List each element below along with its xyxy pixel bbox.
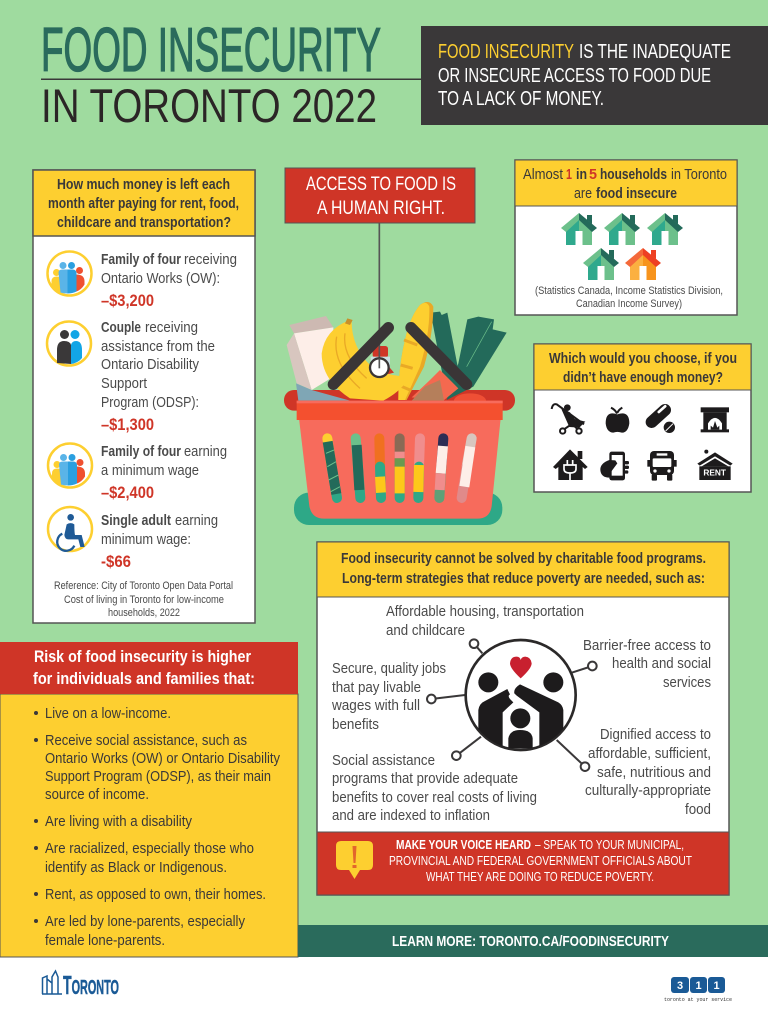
strategy: social assistance: and are indexed to inflation <box>332 808 490 824</box>
row: family of four on minimum wage <box>101 444 227 502</box>
logo: City of Toronto <box>42 970 119 1000</box>
strategy: dignified access: Dignified access to <box>600 727 711 743</box>
basket body <box>297 401 503 519</box>
strategy: housing <box>386 604 584 639</box>
source note: (Statistics Canada, Income Statistics Division, <box>535 285 723 297</box>
strategy: dignified access: affordable, sufficient, <box>588 746 711 762</box>
strategy: dignified access: culturally-appropriate <box>585 783 711 799</box>
call to action text <box>389 837 692 884</box>
reference note: Reference: City of Toronto Open Data Portal <box>54 580 233 592</box>
risk bullet list: Receive social assistance, such as <box>45 733 247 749</box>
row: family of four on Ontario Works <box>101 252 237 310</box>
panel header: 1 in 5: in Toronto <box>671 167 727 183</box>
basket slots <box>326 438 472 498</box>
source note: Canadian Income Survey) <box>576 298 682 310</box>
panel header: 1 in 5 <box>515 160 737 206</box>
row: couple on ODSP <box>101 320 215 434</box>
risk bullet list: Are led by lone-parents, especially <box>45 914 246 930</box>
panel: risk of food insecurity <box>0 642 298 957</box>
row: family of four on minimum wage: –$2,400 <box>101 483 154 502</box>
row: family of four on Ontario Works: receiving <box>184 252 237 268</box>
row: single adult on minimum wage: Single adult <box>101 513 171 529</box>
hanging line <box>377 223 382 367</box>
panel header: strategies: Food insecurity cannot be solved by charitable food programs. <box>341 551 706 567</box>
risk bullet list: Are racialized, especially those who <box>45 841 254 857</box>
strategy: housing: Affordable housing, transportation <box>386 604 584 620</box>
strategy: social assistance: benefits to cover real costs of living <box>332 790 537 806</box>
illustration: shopping basket of food <box>284 223 515 525</box>
row: single adult on minimum wage: earning <box>175 513 218 529</box>
panel: money left each month <box>33 170 255 623</box>
call to action text: PROVINCIAL AND FEDERAL GOVERNMENT OFFICIALS ABOUT <box>389 853 692 868</box>
banner: learn more <box>298 925 768 957</box>
strategy: dignified access <box>585 727 711 818</box>
icon: family of four <box>48 252 92 296</box>
row: couple on ODSP: assistance from the <box>101 339 215 355</box>
row: couple on ODSP: Couple <box>101 320 141 336</box>
handle clasp <box>370 358 389 377</box>
icons: expense choices <box>552 402 733 481</box>
basket shadow <box>294 493 502 525</box>
title: IN TORONTO 2022 <box>41 79 377 132</box>
strategy: jobs: that pay livable <box>332 680 421 696</box>
panel header: 1 in 5: in <box>576 167 587 183</box>
panel header: 1 in 5: households <box>600 167 667 183</box>
baguette <box>398 302 433 400</box>
logo: 311: 3 <box>677 980 683 992</box>
strategy: jobs <box>331 661 446 733</box>
reference note: households, 2022 <box>108 607 180 619</box>
row: couple on ODSP: Program (ODSP): <box>101 395 199 411</box>
panel header: which would you choose <box>534 344 751 390</box>
leeks <box>431 312 507 400</box>
bottle <box>371 346 394 375</box>
icon: couple <box>47 322 91 366</box>
icon: single adult wheelchair <box>48 507 92 551</box>
icon: rent house: RENT <box>703 467 727 477</box>
strategy: social assistance <box>332 753 537 824</box>
title <box>41 16 421 132</box>
strategy: barrier-free access: health and social <box>612 656 711 672</box>
strategy: social assistance: programs that provide adequate <box>332 771 518 787</box>
icon: family of four, minimum wage <box>48 444 92 488</box>
panel: 1 in 5 households <box>515 160 737 315</box>
call to action text: MAKE YOUR VOICE HEARD <box>396 837 531 852</box>
panel: which would you choose <box>534 344 751 492</box>
strategy: barrier-free access <box>583 638 711 691</box>
risk heading: for individuals and families that: <box>33 669 255 688</box>
panel header: 1 in 5: food insecure <box>596 186 677 202</box>
banner: learn more: LEARN MORE: TORONTO.CA/FOODINSECURITY <box>392 933 669 950</box>
logo: 311 <box>664 977 732 1003</box>
reference note: Cost of living in Toronto for low-income <box>64 594 224 606</box>
logo: City of Toronto: TORONTO <box>63 970 119 1000</box>
source note <box>535 285 723 310</box>
icon: stroller <box>552 404 585 434</box>
icon: apple <box>606 408 629 433</box>
panel header: 1 in 5: are <box>574 186 592 202</box>
panel header: 1 in 5: Almost <box>523 167 563 183</box>
definition panel: FOOD INSECURITY <box>438 41 574 63</box>
icon: home energy <box>553 449 588 480</box>
panel header: money left: childcare and transportation? <box>57 215 231 231</box>
milk carton <box>287 316 350 401</box>
strategy: barrier-free access: services <box>663 675 711 691</box>
call to action text: WHAT THEY ARE DOING TO REDUCE POVERTY. <box>426 869 654 884</box>
strategy: jobs: benefits <box>332 717 379 733</box>
risk bullet list: Support Program (ODSP), as their main <box>45 769 271 785</box>
icon: people under a roof <box>478 672 563 750</box>
strategy: social assistance: Social assistance <box>332 753 435 769</box>
icon: heart <box>510 657 532 678</box>
logo: 311: toronto at your service <box>664 997 732 1003</box>
icon: fireplace <box>701 407 729 432</box>
risk bullet list <box>34 706 281 949</box>
definition panel <box>421 26 768 125</box>
strategy: jobs: Secure, quality jobs <box>332 661 446 677</box>
icon: bus <box>647 451 677 481</box>
title: FOOD INSECURITY <box>41 16 381 85</box>
row: family of four on Ontario Works: Family of four <box>101 252 181 268</box>
meat and wrap <box>412 370 486 408</box>
row: family of four on minimum wage: a minimum wage <box>101 463 199 479</box>
row: family of four on Ontario Works: Ontario Works (OW): <box>101 271 220 287</box>
call to action text: – SPEAK TO YOUR MUNICIPAL, <box>535 837 684 852</box>
panel header: money left: month after paying for rent, food, <box>48 196 239 212</box>
row: family of four on Ontario Works: –$3,200 <box>101 291 154 310</box>
risk bullet list: Are living with a disability <box>45 814 193 830</box>
panel header: strategies <box>317 542 729 597</box>
icon: five houses, one highlighted <box>561 213 683 280</box>
panel header: which would you choose: didn’t have enough money? <box>563 370 723 386</box>
diagram: community hub with spokes <box>427 639 597 771</box>
callout: access to food is a human right <box>285 168 475 223</box>
basket back rim <box>284 390 515 411</box>
panel header: money left: How much money is left each <box>57 177 230 193</box>
icon: phone in hand <box>600 452 629 480</box>
risk bullet list: Ontario Works (OW) or Ontario Disability <box>45 751 281 767</box>
row: couple on ODSP: Support <box>101 376 147 392</box>
icon: rent house <box>697 450 733 480</box>
row: family of four on minimum wage: earning <box>184 444 227 460</box>
definition panel: TO A LACK OF MONEY. <box>438 88 604 110</box>
panel: long-term strategies <box>317 542 729 895</box>
panel header: which would you choose: Which would you choose, if you <box>549 351 737 367</box>
callout: access to food is a human right: ACCESS TO FOOD IS <box>306 174 456 195</box>
risk bullet list: female lone-parents. <box>45 933 165 949</box>
callout: access to food is a human right: A HUMAN RIGHT. <box>317 198 445 219</box>
risk heading <box>0 642 298 694</box>
bananas <box>322 318 409 401</box>
reference note <box>54 580 233 619</box>
logo: 311: 1 <box>695 980 702 992</box>
banner: make your voice heard <box>317 832 729 895</box>
row: couple on ODSP: receiving <box>145 320 198 336</box>
strategy: housing: and childcare <box>386 623 465 639</box>
row: single adult on minimum wage: -$66 <box>101 552 131 571</box>
row: single adult on minimum wage: minimum wage: <box>101 532 191 548</box>
row: single adult on minimum wage <box>101 513 218 571</box>
risk bullet list: Rent, as opposed to own, their homes. <box>45 887 266 903</box>
strategy: dignified access: safe, nutritious and <box>597 765 711 781</box>
row: couple on ODSP: Ontario Disability <box>101 357 200 373</box>
risk bullet list: Live on a low-income. <box>45 706 171 722</box>
strategy: barrier-free access: Barrier-free access to <box>583 638 711 654</box>
strategy: jobs: wages with full <box>331 698 420 714</box>
panel header: money left <box>33 170 255 236</box>
risk bullet list: identify as Black or Indigenous. <box>45 860 227 876</box>
icon: pills <box>643 402 675 433</box>
panel header: 1 in 5: 1 <box>566 167 572 183</box>
strategy: dignified access: food <box>685 802 711 818</box>
risk heading: Risk of food insecurity is higher <box>34 647 251 666</box>
row: family of four on minimum wage: Family of four <box>101 444 181 460</box>
panel header: strategies: Long-term strategies that reduce poverty are needed, such as: <box>342 571 705 587</box>
row: couple on ODSP: –$1,300 <box>101 415 154 434</box>
logo: 311: 1 <box>713 980 720 992</box>
panel header: 1 in 5: 5 <box>589 167 597 183</box>
risk bullet list: source of income. <box>45 787 149 803</box>
icon: alert speech bubble <box>336 841 373 879</box>
basket handles <box>333 328 467 384</box>
